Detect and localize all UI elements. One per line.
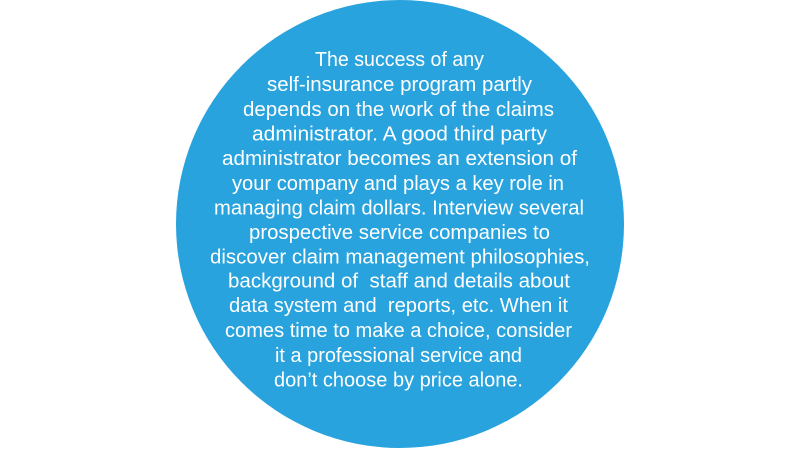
- text block: self-insurance advice: self-insurance program partly: [267, 74, 532, 96]
- text block: self-insurance advice: administrator becomes an extension of: [222, 148, 577, 170]
- text block: self-insurance advice: prospective service companies to: [249, 222, 550, 244]
- text block: self-insurance advice: managing claim dollars. Interview several: [214, 198, 584, 220]
- text block: self-insurance advice: The success of any: [315, 49, 484, 71]
- text block: self-insurance advice: discover claim management philosophies,: [210, 246, 590, 268]
- text block: self-insurance advice: your company and plays a key role in: [232, 173, 564, 195]
- text block: self-insurance advice: administrator. A good third party: [252, 124, 547, 146]
- text block: self-insurance advice: data system and reports, etc. When it: [229, 295, 568, 317]
- text block: self-insurance advice: [210, 49, 590, 392]
- text block: self-insurance advice: comes time to make a choice, consider: [225, 320, 572, 342]
- text block: self-insurance advice: depends on the work of the claims: [243, 99, 554, 121]
- panel: blue circle: [176, 0, 624, 448]
- text block: self-insurance advice: background of staff and details about: [228, 270, 570, 292]
- text block: self-insurance advice: don’t choose by price alone.: [274, 370, 523, 392]
- text block: self-insurance advice: it a professional service and: [275, 345, 522, 367]
